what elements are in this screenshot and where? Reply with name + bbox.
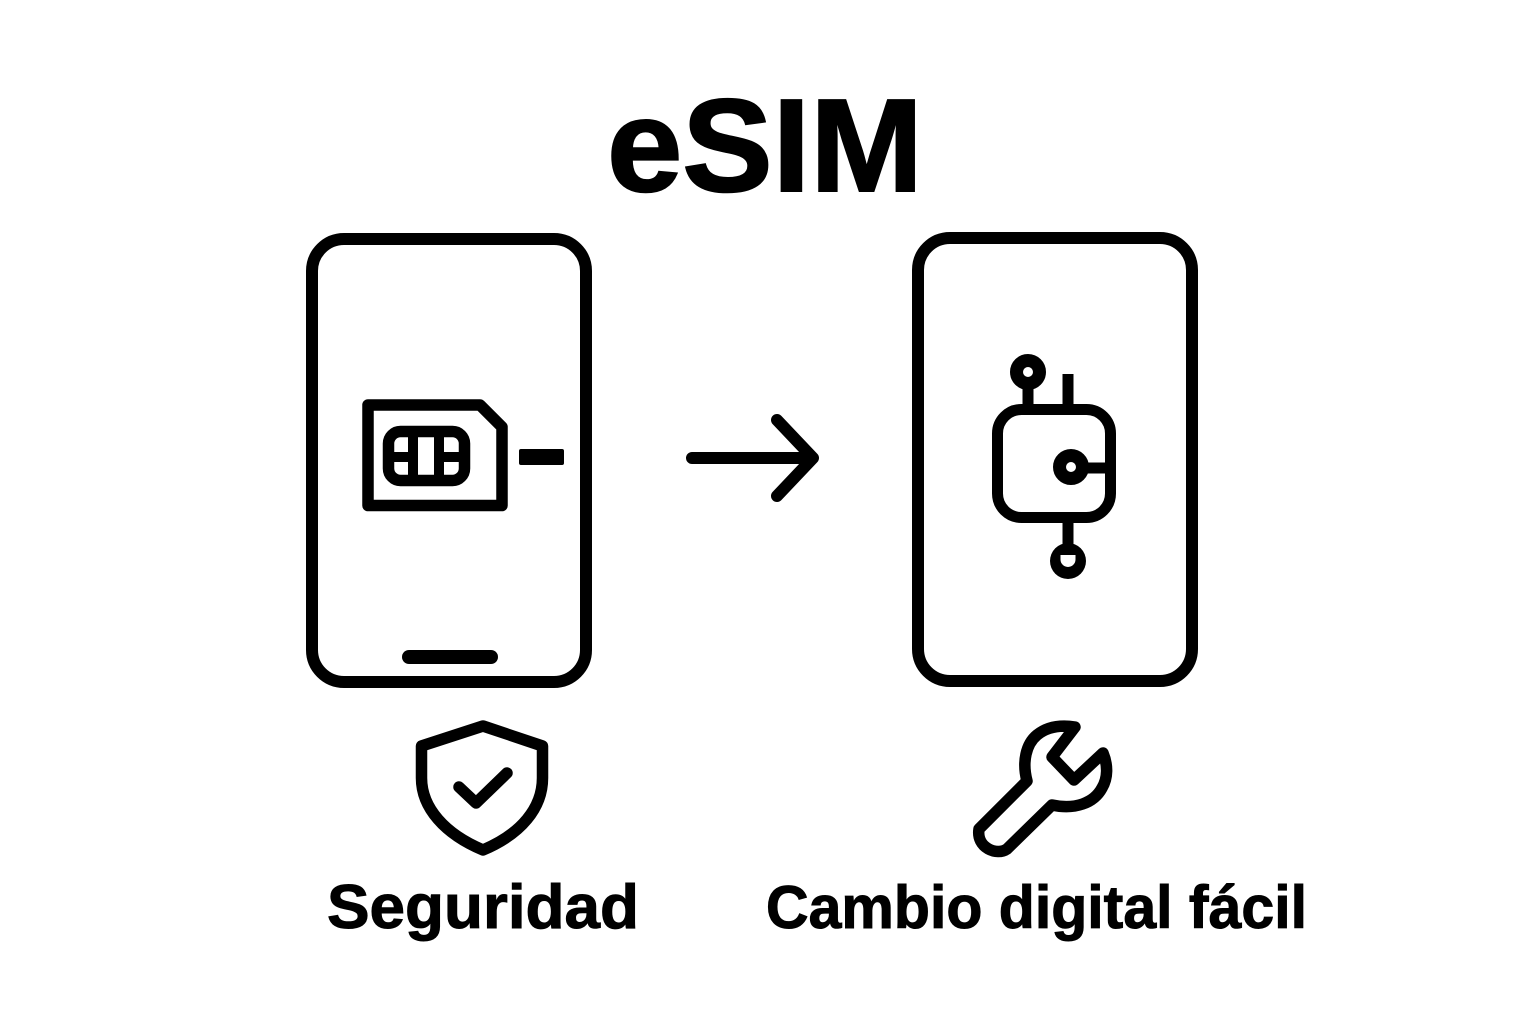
icon: wrench [979,726,1107,852]
title: eSIM [607,72,923,219]
phone home bar [402,650,498,664]
panel: phone with physical SIM [312,239,586,682]
label: Cambio digital fácil: Cambio digital fácil [766,874,1307,941]
icon: eSIM chip [998,360,1110,579]
arrow [692,420,813,496]
SIM chip [388,431,465,481]
panel: phone with eSIM [918,238,1192,681]
phone body left [312,239,586,682]
icon: shield with check [422,726,542,850]
label: Seguridad: Seguridad [327,873,639,942]
icon: SIM card [368,405,502,506]
SIM side bar [519,449,564,465]
phone body right [918,238,1192,681]
